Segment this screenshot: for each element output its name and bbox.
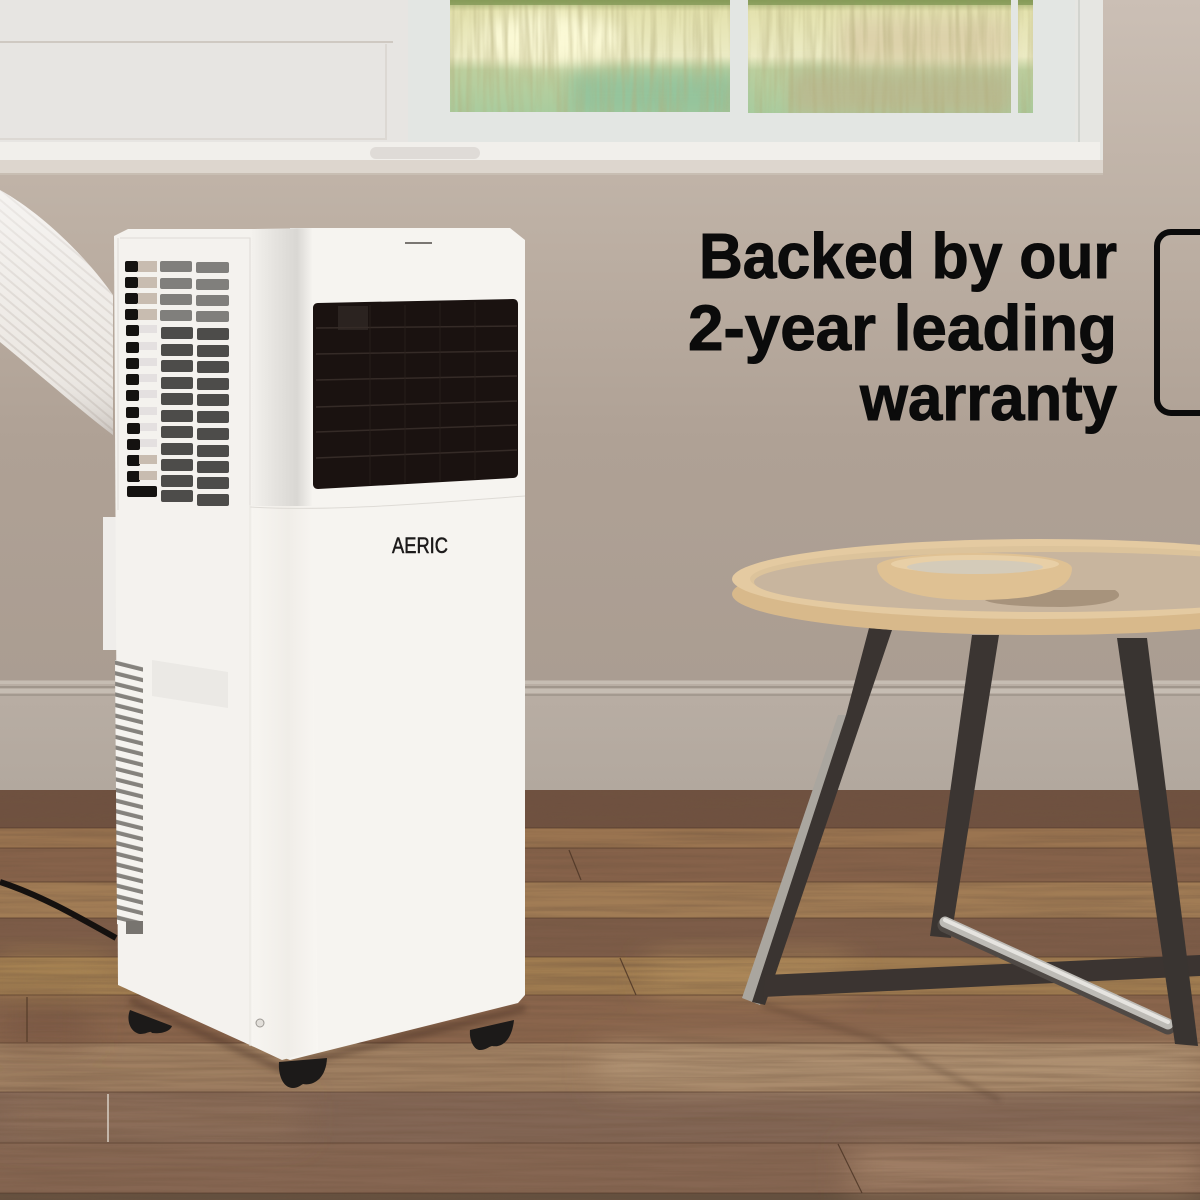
rear upper grille [125, 261, 229, 506]
heading: warranty message: Backed by our [699, 220, 1117, 292]
table leg: back [930, 635, 999, 938]
icon: warranty badge outline [1157, 232, 1200, 413]
table [732, 539, 1200, 1100]
front air vent [313, 299, 518, 489]
heading: warranty message: warranty [859, 362, 1117, 434]
unit side panel [114, 229, 290, 1060]
top indicator light [405, 242, 432, 244]
table shadow [762, 1005, 1000, 1100]
power cord [0, 882, 116, 938]
view through window [450, 0, 1035, 118]
unit rounded corner upper [252, 228, 312, 506]
bar: silver base [945, 920, 1168, 1027]
caster wheels [128, 1010, 514, 1088]
portable air conditioner [103, 228, 525, 1088]
window frame [408, 0, 1080, 142]
window kit bracket [103, 517, 123, 650]
tray [877, 553, 1072, 600]
heading: warranty message: 2-year leading [688, 292, 1117, 364]
side panel seam [118, 238, 525, 510]
heading: warranty message [688, 220, 1117, 434]
exhaust hose [0, 190, 113, 435]
unit rounded corner lower [252, 506, 318, 1060]
brand logo: AERIC [392, 533, 448, 558]
window sill [0, 142, 1103, 175]
handle recess [152, 660, 228, 708]
floor [0, 790, 1200, 1200]
drain plug [256, 1019, 264, 1027]
unit front panel [290, 228, 525, 1060]
skirting board [0, 680, 1200, 792]
table leg: left [742, 628, 892, 1005]
table leg: right [1117, 638, 1198, 1046]
tray shadow [985, 590, 1119, 607]
bar: dark base [763, 955, 1200, 997]
table top [732, 539, 1200, 635]
wall [0, 0, 1200, 800]
unit floor shadow [130, 1000, 525, 1068]
rear lower grille [115, 660, 143, 934]
window blind panels [0, 0, 410, 145]
window [0, 0, 1103, 175]
